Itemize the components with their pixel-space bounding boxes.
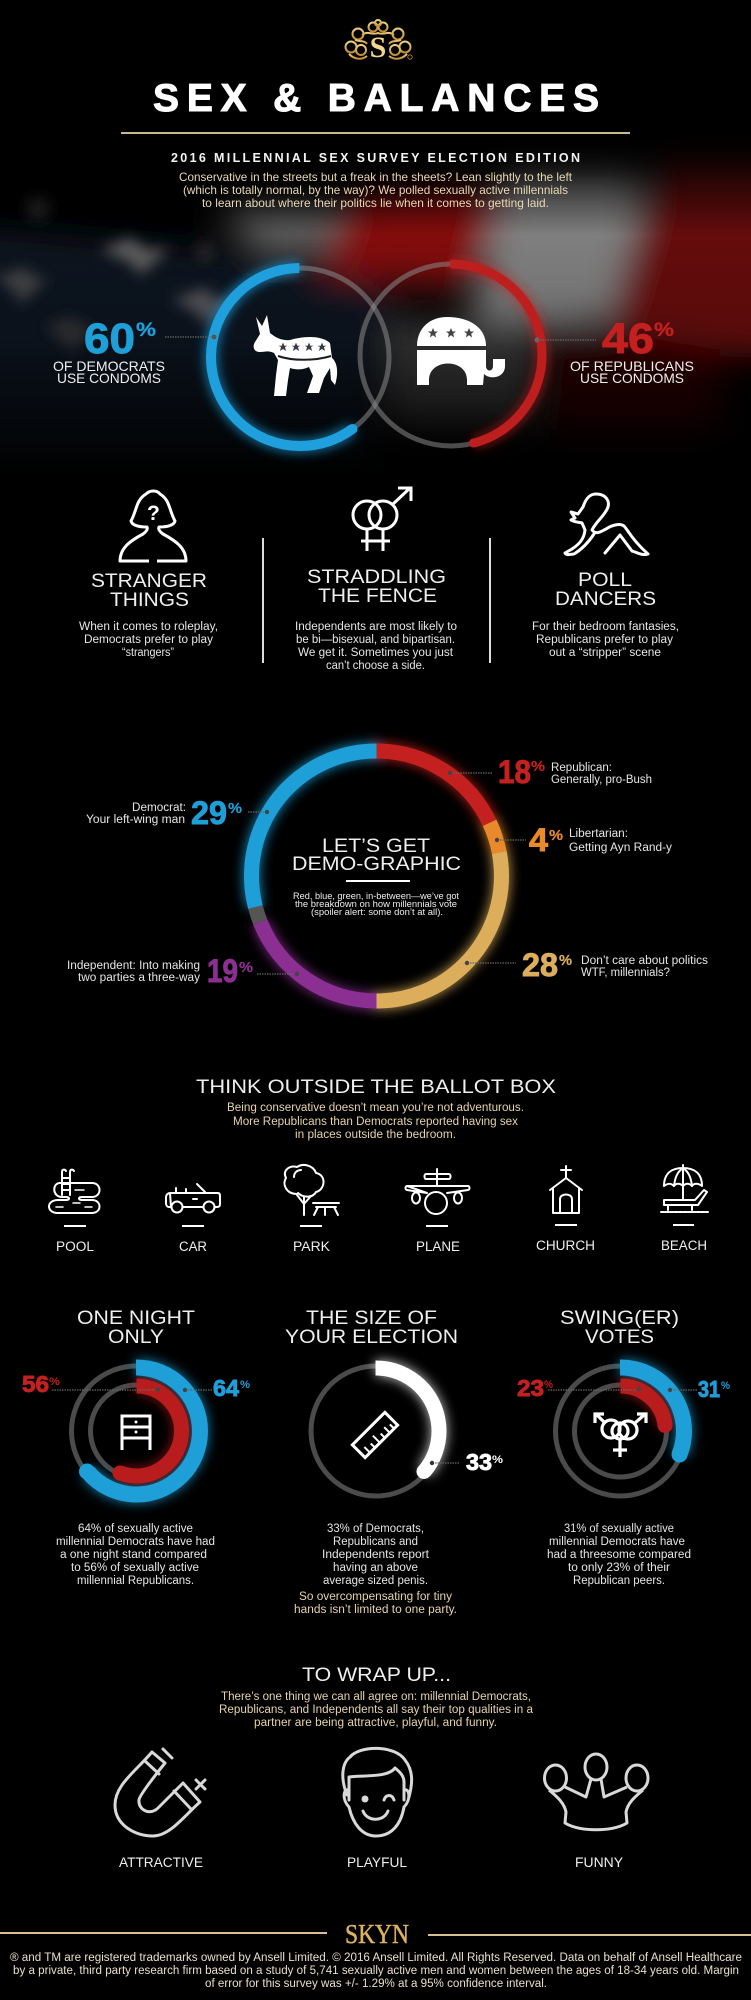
stat: 60% democrats: OF DEMOCRATS [53,358,165,374]
background: blurred american flag [0,0,751,539]
donut center title: the breakdown on how millennials vote [295,899,457,909]
panel: swing(er) votes: 31 [698,1376,720,1402]
panel: straddling the fence: can’t choose a side. [326,660,425,672]
icon: interlocked gender symbols [595,1414,646,1457]
legal text: ® and TM are registered trademarks owned by Ansell Limited. © 2016 Ansell Limited. All Rights Reserved. Data on behalf of Ansell Healthcare [10,1952,742,1964]
panel: stranger things: Democrats prefer to play [84,634,213,646]
text: wrap up intro: partner are being attractive, playful, and funny. [254,1717,497,1729]
stat: 60% democrats: USE CONDOMS [57,370,161,386]
panel: one night only: 56 [22,1371,49,1397]
location: park: PARK [293,1239,330,1254]
stat: 60% democrats: 60 [84,315,135,363]
glow layer [252,751,502,1001]
description: Republican peers. [573,1575,665,1587]
panel: poll dancers: Republicans prefer to play [536,634,673,646]
title rule [121,132,630,134]
label: 28% don't care: Don’t care about politics [581,955,708,967]
icon: reclining dancer outline [565,494,648,555]
stat: 46% republicans: 46 [602,315,654,363]
description: Independents report [322,1549,430,1561]
stat: 60% democrats [53,315,216,386]
description: to only 23% of their [568,1562,670,1574]
callouts [548,1389,636,1391]
panel: swing(er) votes: % [544,1379,553,1391]
description: average sized penis. [323,1575,428,1587]
donut center title [292,836,461,917]
location: park [284,1165,339,1254]
panel: straddling the fence: be bi—bisexual, and bipartisan. [296,634,455,646]
panel: straddling the fence [295,488,457,672]
label: 19% independent: % [239,959,253,976]
text: wrap up intro: There’s one thing we can all agree on: millennial Democrats, [221,1691,531,1703]
democrat ring [211,268,389,446]
panel: straddling the fence: We get it. Sometimes you just [298,647,454,659]
quality: attractive: ATTRACTIVE [119,1855,203,1870]
logo: gold ornate S crest: S [370,31,386,64]
label: 4% libertarian: Getting Ayn Rand-y [569,842,672,854]
legal text [10,1952,742,1990]
panel: swing(er) votes: % [721,1380,730,1392]
stat: 46% republicans [534,315,694,386]
label: 18% republican: 18 [498,754,531,790]
panel: stranger things: When it comes to roleplay, [79,621,218,633]
description: millennial Republicans. [77,1575,194,1587]
location: car: CAR [179,1239,207,1254]
icon: winking face [343,1748,412,1836]
callouts [52,1389,155,1391]
label: 28% don't care: 28 [522,947,558,983]
panel: stranger things: STRANGER [91,571,207,592]
label: 19% independent: 19 [207,953,238,989]
divider [489,538,491,663]
label: 4% libertarian: 4 [529,822,548,858]
label: 29% democrat: % [228,800,242,817]
panel: the size of your election: 33 [466,1449,492,1475]
label: 18% republican: % [531,758,545,775]
label: 19% independent: two parties a three-way [78,972,200,984]
text: ballot box intro [227,1102,524,1141]
description [322,1523,430,1587]
panel: the size of your election: THE SIZE OF [306,1308,437,1329]
subtitle: 2016 MILLENNIAL SEX SURVEY ELECTION EDITION [171,151,580,165]
label: 19% independent [67,953,299,989]
description: to 56% of sexually active [71,1562,199,1574]
label: 19% independent: Independent: Into making [67,960,200,972]
footer rules [0,1932,751,1936]
panel: swing(er) votes: SWING(ER) [560,1308,679,1329]
heading: to wrap up: TO WRAP UP... [302,1665,451,1686]
label: 29% democrat: 29 [191,795,227,831]
location: car [166,1184,220,1254]
location: beach [661,1165,708,1253]
location: beach: BEACH [661,1238,707,1253]
legal text: by a private, third party research firm based on a study of 5,741 sexually active men and women between the ages of 18-34 years old. Margin [13,1965,739,1977]
icon: bisexual symbol [353,488,411,551]
intro text [179,170,573,210]
description: a one night stand compared [60,1549,207,1561]
panel: swing(er) votes: VOTES [585,1327,654,1348]
label: 28% don't care: WTF, millennials? [581,967,670,979]
icon: mystery woman: ? [147,502,160,525]
description [56,1523,215,1587]
quality: attractive [115,1749,205,1870]
description: having an above [333,1562,418,1574]
description: had a threesome compared [547,1549,691,1561]
icon: crown [544,1754,648,1830]
panel: swing(er) votes: 23 [517,1375,544,1401]
radial chart: 33% [311,1366,441,1496]
quality: playful [343,1748,412,1870]
location: plane [406,1169,470,1254]
panel: the size of your election: % [492,1454,503,1466]
donut chart: political affiliation [252,751,502,1001]
panel: poll dancers: DANCERS [555,589,656,610]
donut center title: Red, blue, green, in-between—we’ve got [293,891,459,901]
panel: the size of your election: So overcompensating for tiny [299,1591,452,1603]
title: SEX & BALANCES [153,77,599,120]
intro text: to learn about where their politics lie when it comes to getting laid. [202,196,549,210]
stat: 46% republicans: USE CONDOMS [580,370,684,386]
panel: one night only: ONLY [108,1327,164,1348]
panel: the size of your election [285,1308,503,1616]
description [547,1523,691,1587]
quality: funny [544,1754,648,1870]
logo: gold ornate S crest [346,20,412,64]
icon: mystery woman [120,491,186,561]
text: wrap up intro: Republicans, and Independents all say their top qualities in a [219,1704,534,1716]
location: pool: POOL [56,1239,94,1254]
description: Republicans and [333,1536,418,1548]
donut center title: (spoiler alert: some don’t at all). [311,907,443,917]
panel: straddling the fence: Independents are most likely to [295,621,457,633]
panel: stranger things: “strangers” [122,647,174,659]
callout [435,1462,460,1464]
panel: one night only: ONE NIGHT [77,1308,195,1329]
text: ballot box intro: in places outside the bedroom. [295,1129,456,1141]
location: church [536,1166,595,1253]
quality: funny: FUNNY [575,1855,623,1870]
description: 33% of Democrats, [327,1523,424,1535]
text: wrap up intro [219,1691,534,1729]
panel: the size of your election: YOUR ELECTION [285,1327,458,1348]
label: 18% republican: Generally, pro-Bush [551,774,652,786]
panel: one night only: % [49,1376,60,1388]
legal text: of error for this survey was +/- 1.29% at a 95% confidence interval. [205,1978,547,1990]
panel: the size of your election: hands isn’t limited to one party. [294,1604,457,1616]
panel: one night only: 64 [213,1375,239,1401]
venn rings: democrats and republicans [211,264,542,448]
panel: straddling the fence: THE FENCE [318,586,437,607]
label: 28% don't care [465,947,708,983]
panel: poll dancers: For their bedroom fantasies, [532,621,679,633]
location: plane: PLANE [416,1239,460,1254]
label: 18% republican: Republican: [551,762,612,774]
intro text: (which is totally normal, by the way)? We polled sexually active millennials [183,183,568,197]
stat: 46% republicans: OF REPUBLICANS [570,358,694,374]
heading: think outside the ballot box: THINK OUTSIDE THE BALLOT BOX [196,1077,556,1098]
icon: magnet [115,1749,205,1836]
label: 28% don't care: % [559,952,572,969]
donut center title: DEMO-GRAPHIC [292,854,461,875]
radial chart: 31% vs 23% [556,1366,688,1496]
divider [262,538,264,663]
icon: ruler [352,1412,398,1458]
panel: one night only: % [240,1379,250,1391]
label: 4% libertarian [495,822,672,858]
label: 4% libertarian: Libertarian: [569,828,628,840]
donut center title: LET’S GET [322,836,430,857]
location: church: CHURCH [536,1238,595,1253]
label: 29% democrat [86,795,269,831]
segments [252,751,502,1001]
panel: swing(er) votes [517,1308,730,1587]
panel: straddling the fence: STRADDLING [307,567,446,588]
description: millennial Democrats have [549,1536,685,1548]
label: 29% democrat: Democrat: [132,802,186,814]
intro text: Conservative in the streets but a freak in the sheets? Lean slightly to the left [179,170,573,184]
panel: stranger things [79,491,218,659]
panel: one night only [22,1308,250,1587]
description: millennial Democrats have had [56,1536,215,1548]
location: pool [49,1170,100,1254]
label: 18% republican [448,754,652,790]
panel: poll dancers [532,494,679,659]
republican ring [360,264,542,448]
panel: stranger things: THINGS [110,590,189,611]
panel: poll dancers: out a “stripper” scene [549,647,661,659]
stat: 46% republicans: % [654,320,674,341]
icon: nightstand [122,1416,150,1450]
label: 4% libertarian: % [549,827,563,844]
description: 64% of sexually active [78,1523,193,1535]
logo: skyn: SKYN [345,1919,409,1949]
icon: republican elephant [417,317,505,385]
text: ballot box intro: More Republicans than Democrats reported having sex [233,1116,518,1128]
radial chart: 64% vs 56% [72,1366,202,1496]
label: 29% democrat: Your left-wing man [86,814,185,826]
panel: poll dancers: POLL [578,570,632,591]
description: 31% of sexually active [564,1523,674,1535]
stat: 60% democrats: % [136,320,156,341]
text: ballot box intro: Being conservative doesn’t mean you’re not adventurous. [227,1102,524,1114]
icon: democrat donkey [254,315,337,396]
quality: playful: PLAYFUL [347,1855,407,1870]
